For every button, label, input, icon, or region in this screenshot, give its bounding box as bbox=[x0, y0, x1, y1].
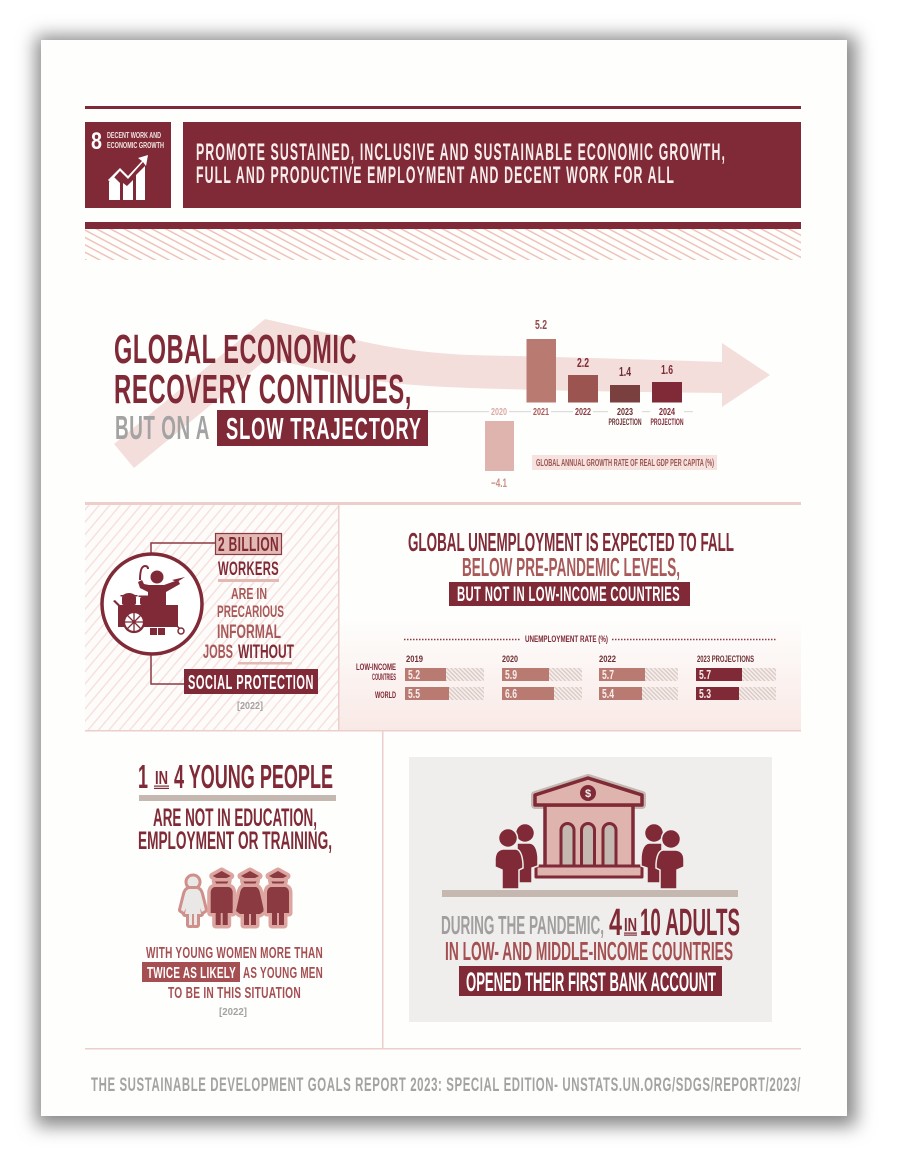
icon: SDG 8 tile: ECONOMIC GROWTH bbox=[107, 141, 164, 150]
text: workers bbox=[218, 559, 279, 582]
text: young women twice as likely: TWICE AS LIKELY bbox=[147, 965, 236, 982]
callout: first bank account bbox=[459, 966, 722, 997]
bar 2024 projection bbox=[650, 362, 684, 427]
bar 2020 bbox=[485, 406, 514, 490]
column 2022: 5.4 bbox=[602, 686, 615, 701]
text: precarious informal jobs: JOBS bbox=[203, 642, 233, 663]
text: not in education: ARE NOT IN EDUCATION, bbox=[153, 804, 317, 832]
chart: unemployment rate bbox=[356, 634, 776, 701]
bar 2021: 5.2 bbox=[535, 317, 547, 332]
heading: 1 in 4 young people: IN bbox=[155, 768, 168, 788]
year note: [2022] bbox=[219, 1007, 247, 1018]
heading: global economic recovery bbox=[114, 326, 428, 446]
column 2020: 5.9 bbox=[505, 667, 517, 682]
bar 2020: 2020 bbox=[491, 407, 507, 418]
bar 2022: 2022 bbox=[575, 407, 591, 418]
bar 2022: 2.2 bbox=[577, 355, 589, 370]
stat: 2 billion bbox=[216, 534, 282, 556]
bar 2021: 2021 bbox=[533, 407, 549, 418]
text: not in education bbox=[138, 804, 332, 855]
chart: unemployment rate: COUNTRIES bbox=[372, 672, 396, 682]
callout: social protection: SOCIAL PROTECTION bbox=[188, 672, 314, 694]
heading: global economic recovery: RECOVERY CONTINUES, bbox=[114, 366, 412, 412]
column 2023 projection: 5.7 bbox=[699, 667, 711, 682]
figure: young man bbox=[267, 871, 289, 925]
icon: street vendor bbox=[102, 554, 202, 654]
building: $ bbox=[585, 788, 591, 800]
row labels: WORLD bbox=[375, 690, 396, 700]
column 2019: 2019 bbox=[406, 654, 423, 665]
bar 2024 projection: 2024 bbox=[659, 407, 675, 418]
text: young women twice as likely: WITH YOUNG WOMEN MORE THAN bbox=[146, 945, 323, 962]
header bbox=[85, 106, 801, 260]
heading: 1 in 4 young people: 1 bbox=[138, 758, 148, 795]
bar 2022 bbox=[568, 355, 598, 418]
icon: SDG 8 tile bbox=[85, 122, 171, 208]
heading: 1 in 4 young people: 4 YOUNG PEOPLE bbox=[174, 758, 333, 795]
heading: global economic recovery: SLOW TRAJECTORY bbox=[226, 411, 422, 446]
bar 2023 projection bbox=[608, 364, 642, 427]
heading: unemployment: BELOW PRE-PANDEMIC LEVELS, bbox=[462, 552, 680, 582]
year note: [2022] bbox=[237, 701, 263, 712]
text: 4 in 10 adults bbox=[441, 902, 740, 966]
column 2019: 5.2 bbox=[408, 667, 420, 682]
building bbox=[535, 778, 642, 877]
text: young women twice as likely: AS YOUNG MEN bbox=[243, 965, 323, 982]
banner bbox=[183, 122, 801, 208]
bar chart: GDP growth bbox=[428, 317, 717, 490]
chart caption bbox=[532, 455, 717, 470]
bar 2024 projection: 1.6 bbox=[661, 362, 673, 377]
text: precarious informal jobs: PRECARIOUS bbox=[217, 602, 284, 621]
callout: social protection bbox=[184, 669, 318, 694]
people right bbox=[641, 824, 684, 889]
heading: unemployment bbox=[408, 527, 734, 606]
heading: global economic recovery: BUT ON A bbox=[115, 409, 210, 446]
figure: young man bbox=[211, 871, 233, 925]
text: 4 in 10 adults: IN bbox=[624, 915, 637, 935]
text: precarious informal jobs bbox=[203, 586, 294, 664]
panel: global unemployment bbox=[340, 505, 801, 730]
text: 4 in 10 adults: 4 bbox=[609, 902, 622, 944]
row labels: LOW-INCOME bbox=[356, 662, 396, 672]
icon: SDG 8 tile: 8 bbox=[91, 128, 102, 155]
bar 2021 bbox=[526, 317, 556, 418]
icon: bank with people bbox=[442, 778, 738, 897]
chart caption: GLOBAL ANNUAL GROWTH RATE OF REAL GDP PER CAPITA (%) bbox=[536, 458, 714, 469]
column 2019 bbox=[405, 654, 484, 701]
column 2019: 5.5 bbox=[408, 686, 420, 701]
arrow: trajectory background bbox=[114, 319, 770, 468]
heading: global economic recovery: GLOBAL ECONOMIC bbox=[114, 326, 357, 372]
text: workers: WORKERS bbox=[218, 559, 279, 580]
text: not in education: EMPLOYMENT OR TRAINING, bbox=[138, 827, 332, 855]
column 2022: 5.7 bbox=[602, 667, 614, 682]
figure: young woman highlighted bbox=[181, 876, 205, 925]
bar 2024 projection: PROJECTION bbox=[650, 417, 684, 427]
text: 4 in 10 adults: DURING THE PANDEMIC, bbox=[441, 910, 604, 940]
figure: young woman bbox=[236, 871, 264, 925]
column 2023 projection bbox=[696, 654, 776, 701]
text: precarious informal jobs: WITHOUT bbox=[238, 642, 294, 663]
heading: unemployment: BUT NOT IN LOW-INCOME COUNTRIES bbox=[457, 583, 680, 606]
heading: 1 in 4 young people bbox=[138, 758, 336, 801]
panel: informal workers bbox=[85, 505, 338, 730]
panel: young people bbox=[138, 758, 336, 1018]
icon: four young people bbox=[181, 871, 289, 925]
text: precarious informal jobs: ARE IN bbox=[231, 586, 267, 603]
bar 2023 projection: 2023 bbox=[617, 407, 633, 418]
chart: unemployment rate: UNEMPLOYMENT RATE (%) bbox=[525, 634, 608, 644]
bar 2020: −4.1 bbox=[491, 476, 507, 490]
panel: bank account: 10 ADULTS bbox=[640, 902, 740, 944]
column 2022 bbox=[599, 654, 678, 701]
icon: SDG 8 tile: DECENT WORK AND bbox=[107, 131, 161, 140]
column 2022: 2022 bbox=[599, 654, 616, 665]
text: young women twice as likely: TO BE IN THIS SITUATION bbox=[168, 985, 301, 1002]
panel: bank account bbox=[409, 757, 772, 1022]
bar 2023 projection: 1.4 bbox=[619, 364, 632, 379]
text: precarious informal jobs: INFORMAL bbox=[217, 622, 281, 643]
bar 2023 projection: PROJECTION bbox=[608, 417, 642, 427]
stat: 2 billion: 2 BILLION bbox=[218, 534, 279, 556]
text: young women twice as likely bbox=[142, 945, 323, 1002]
row labels bbox=[356, 662, 396, 700]
people left bbox=[495, 824, 538, 889]
column 2020 bbox=[502, 654, 582, 701]
column 2020: 6.6 bbox=[505, 686, 517, 701]
column 2023 projection: 2023 PROJECTIONS bbox=[697, 654, 754, 665]
column 2020: 2020 bbox=[502, 654, 518, 665]
column 2023 projection: 5.3 bbox=[699, 686, 711, 701]
